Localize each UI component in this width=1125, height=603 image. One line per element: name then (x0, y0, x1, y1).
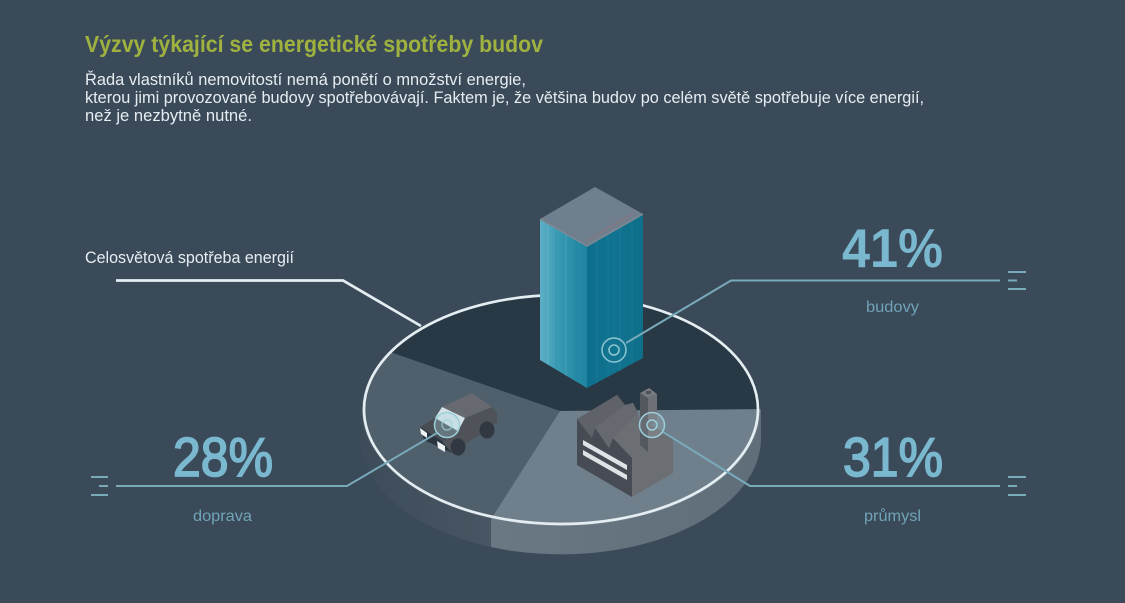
leader: buildings (626, 280, 1000, 343)
disc side: right (491, 409, 761, 554)
leader: transport (116, 433, 437, 486)
icon: car (420, 393, 497, 456)
stat: 41% buildings (842, 217, 943, 316)
callout: transport (91, 412, 460, 495)
label: global consumption: Celosvětová spotřeba energií (85, 248, 294, 267)
disc outline ring (364, 295, 758, 524)
pie disc (362, 294, 761, 554)
stat: 31% industry (843, 426, 943, 525)
stat: 41% buildings: 41% (842, 217, 943, 279)
ticks: industry (1008, 477, 1026, 495)
callout: industry (640, 412, 1026, 495)
leader: global consumption (116, 280, 421, 326)
disc side: left (361, 410, 491, 547)
stat: 31% industry: 31% (843, 426, 943, 488)
icon: factory (577, 388, 673, 497)
ticks: transport (91, 477, 108, 495)
target marker: industry (640, 412, 664, 438)
target marker: buildings (602, 338, 626, 362)
callout: buildings (602, 272, 1026, 362)
intro text: než je nezbytně nutné. (85, 106, 252, 125)
intro text: kterou jimi provozované budovy spotřebovávají. Faktem je, že většina budov po celém světě spotřebuje více energií, (85, 88, 924, 107)
leader: industry (663, 432, 1000, 486)
target marker: transport (434, 412, 460, 438)
icon: office building (540, 187, 643, 388)
slice: industry 31% (492, 409, 760, 526)
intro text: Řada vlastníků nemovitostí nemá ponětí o množství energie, (85, 70, 526, 89)
stat: 31% industry: průmysl (864, 507, 921, 525)
ticks: buildings (1008, 272, 1026, 289)
slice: buildings 41% (392, 297, 760, 411)
stat: 28% transport: doprava (193, 508, 252, 525)
stat: 28% transport: 28% (173, 426, 273, 488)
intro text (85, 70, 924, 125)
stat: 28% transport (173, 426, 273, 525)
title: Výzvy týkající se energetické spotřeby budov (85, 31, 543, 57)
stat: 41% buildings: budovy (866, 299, 919, 316)
slice: transport 28% (362, 352, 560, 518)
